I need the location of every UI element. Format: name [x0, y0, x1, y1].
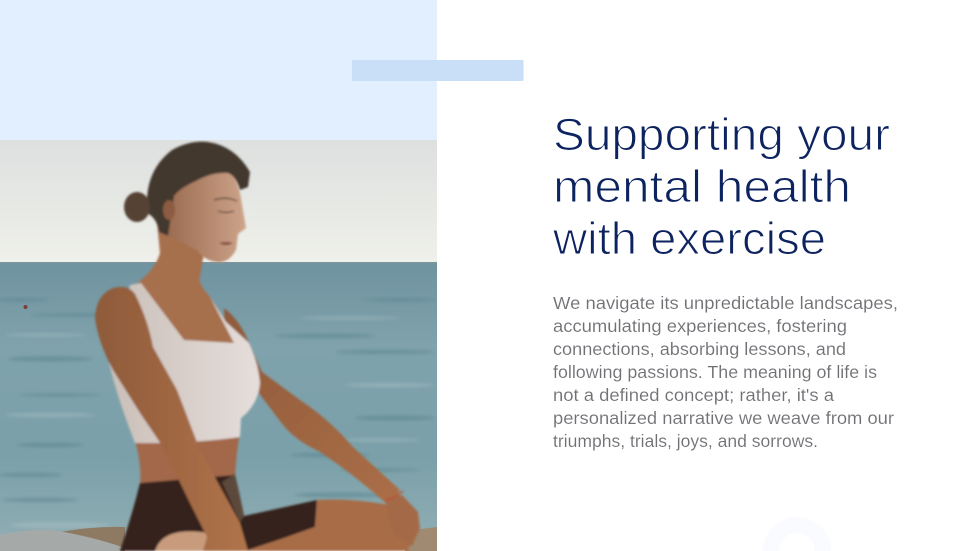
body text: accumulating experiences, fostering: [553, 316, 847, 336]
body text: triumphs, trials, joys, and sorrows.: [553, 431, 818, 451]
sky: [0, 140, 437, 263]
hand on knee: [386, 495, 420, 546]
closed eye and brow: [214, 198, 237, 212]
wristband: [385, 491, 403, 500]
lower leg: [154, 530, 208, 551]
hair bun: [124, 192, 150, 222]
title: mental health: [553, 161, 851, 212]
lips: [219, 242, 233, 245]
white crop top: [109, 283, 260, 443]
body text: following passions. The meaning of life is: [553, 362, 877, 382]
body text: not a defined concept; rather, it's a: [553, 385, 834, 405]
body text: personalized narrative we weave from our: [553, 408, 894, 428]
accent bar: [352, 60, 524, 81]
folded leg: [245, 500, 412, 551]
body text: We navigate its unpredictable landscapes,: [553, 293, 898, 313]
abdomen: [134, 436, 240, 484]
title: with exercise: [552, 213, 826, 264]
photo: woman meditating by the sea: [0, 140, 437, 551]
neck and chest: [136, 222, 236, 345]
title: [552, 109, 890, 264]
ear: [163, 200, 175, 220]
body text: connections, absorbing lessons, and: [553, 339, 846, 359]
sea: [0, 262, 437, 542]
head and face: [160, 172, 246, 262]
body text: [553, 293, 898, 451]
near arm: [95, 287, 248, 551]
hair: [147, 142, 250, 236]
sand and rock: [0, 527, 437, 551]
title: Supporting your: [553, 109, 890, 160]
decorative faint ring: [763, 517, 831, 551]
woman: [95, 142, 420, 551]
shorts: [120, 475, 317, 551]
far arm: [224, 308, 400, 507]
light blue panel: [0, 0, 437, 141]
